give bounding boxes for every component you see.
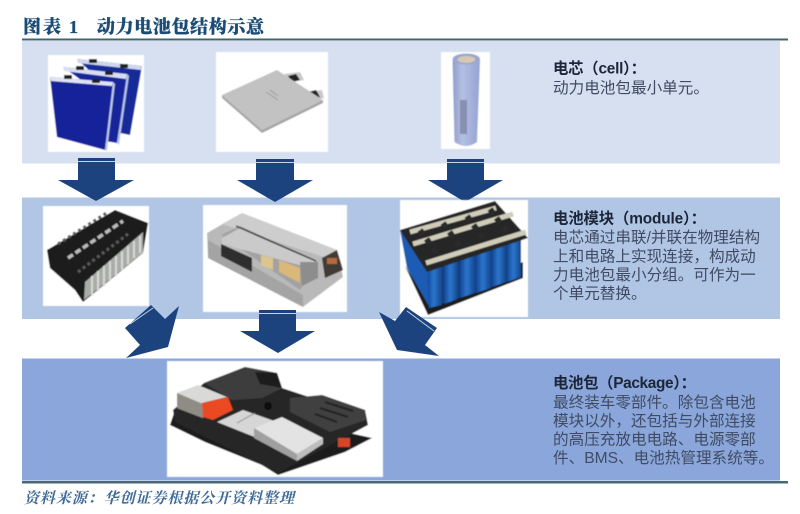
text: cell description	[553, 60, 709, 97]
arrow: module to package left	[125, 305, 179, 358]
image: cylindrical cell	[441, 52, 490, 149]
text: package description: 最终装车零部件。除包含电池	[553, 394, 756, 412]
arrow: cell to module 3	[428, 159, 503, 202]
arrow: module to package right	[379, 307, 439, 356]
panel: module	[22, 198, 780, 319]
title: 动力电池包结构示意	[97, 16, 266, 37]
text: module description: 电池模块（module）：	[553, 210, 706, 228]
arrow: cell to module 2	[237, 159, 313, 202]
title: 1	[69, 17, 78, 37]
image: module 3	[400, 200, 528, 317]
text: module description: 电芯通过串联/并联在物理结构	[553, 228, 760, 246]
text: package description	[553, 373, 774, 467]
source note: 资料来源：华创证券根据公开资料整理	[24, 490, 297, 507]
panel: cell	[22, 41, 780, 164]
text: module description: 力电池包最小分组。可作为一	[553, 266, 756, 284]
text: package description: 件、BMS、电池热管理系统等。	[553, 449, 774, 467]
arrow: cell to module 1	[58, 158, 134, 201]
panel: package	[22, 358, 780, 480]
arrow: module to package centre	[240, 310, 315, 353]
text: cell description: 电芯（cell）：	[553, 60, 646, 78]
text: cell description: 动力电池包最小单元。	[553, 79, 709, 97]
image: prismatic cells	[48, 55, 144, 152]
text: package description: 电池包（Package）：	[553, 373, 696, 392]
text: package description: 的高压充放电电路、电源零部	[553, 430, 756, 448]
image: battery pack	[167, 361, 383, 477]
image: module 1	[43, 206, 149, 306]
text: module description	[553, 210, 760, 302]
image: module 2	[203, 205, 347, 312]
image: pouch cell	[216, 52, 328, 152]
title	[23, 16, 266, 37]
text: module description: 上和电路上实现连接，构成动	[553, 248, 756, 266]
text: package description: 模块以外，还包括与外部连接	[553, 412, 756, 430]
title: 图表	[23, 16, 61, 37]
text: module description: 个单元替换。	[553, 284, 647, 302]
